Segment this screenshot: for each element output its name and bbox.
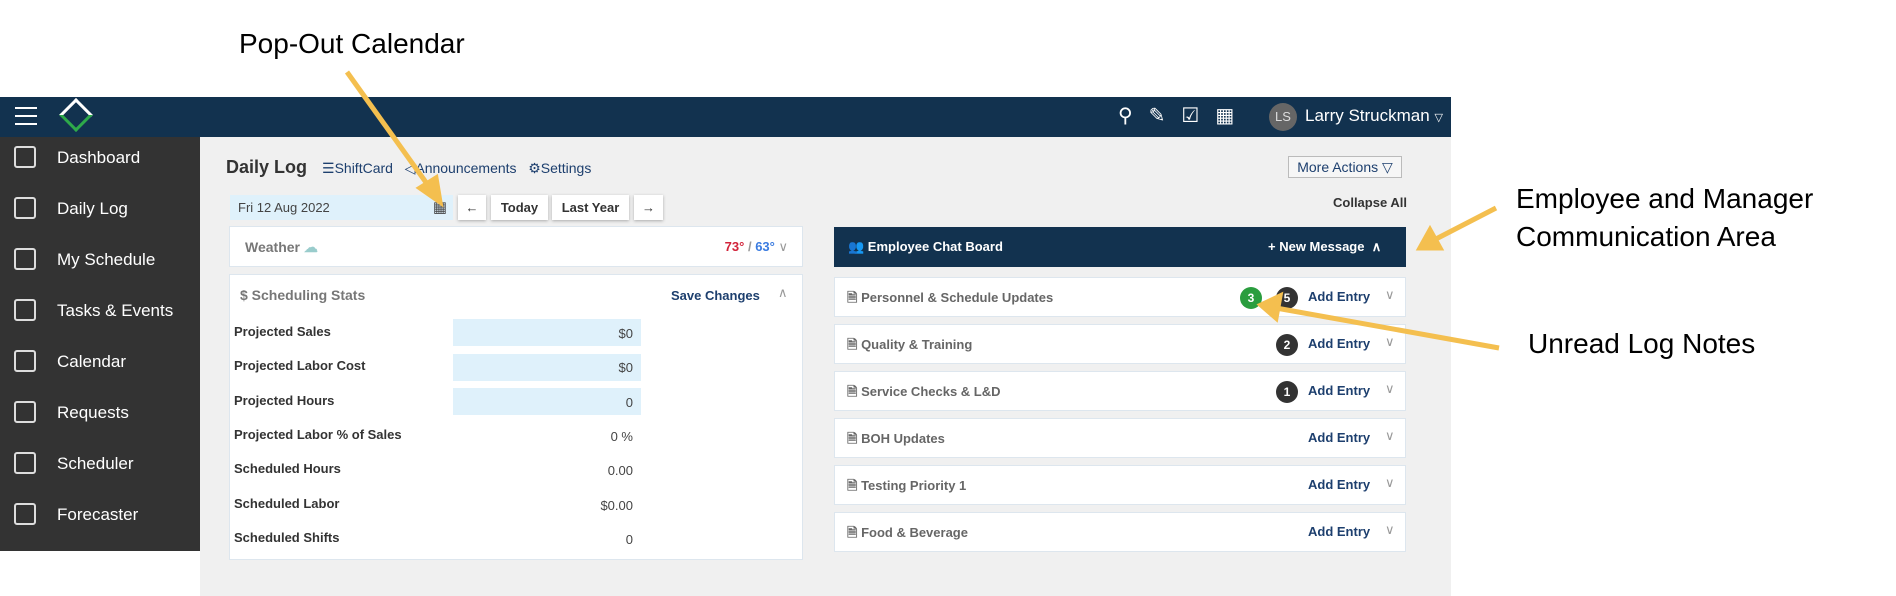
scheduling stats panel: $0.00	[600, 498, 633, 513]
content area	[200, 137, 1451, 596]
more actions button: More Actions ▽	[1297, 159, 1393, 175]
chat board header: 👥 Employee Chat Board	[848, 239, 1003, 254]
nav item	[14, 350, 126, 372]
user avatar: LS	[1275, 109, 1291, 124]
log row: Add Entry	[1308, 383, 1370, 398]
weather panel: 73° / 63° ∨	[725, 239, 788, 254]
text: →	[642, 200, 655, 215]
log row: 🗎 Service Checks & L&D	[847, 384, 1001, 399]
nav item: Forecaster	[57, 505, 138, 524]
nav item: Calendar	[57, 352, 126, 371]
top icons: ⚲✎☑▦	[1118, 105, 1250, 127]
scheduling stats panel: Scheduled Hours	[234, 461, 341, 476]
nav item: Dashboard	[57, 148, 140, 167]
chat board header: + New Message ∧	[1268, 239, 1381, 254]
log row: ∨	[1385, 287, 1395, 302]
log row: Add Entry	[1308, 477, 1370, 492]
nav item: Daily Log	[57, 199, 128, 218]
log row: 🗎 Testing Priority 1	[847, 478, 966, 493]
annotation: communication area: Communication Area	[1516, 221, 1776, 252]
scheduling stats panel: ∧	[778, 285, 788, 300]
nav item: My Schedule	[57, 250, 155, 269]
page heading: Daily Log ☰ShiftCard ◁Announcements ⚙Settings	[226, 157, 591, 177]
sidebar	[0, 137, 200, 551]
log row: Add Entry	[1308, 524, 1370, 539]
scheduling stats panel	[229, 274, 803, 560]
chat board header	[834, 227, 1406, 267]
nav item	[14, 248, 155, 270]
icon: hamburger	[15, 107, 37, 125]
scheduling stats panel: 0	[626, 395, 633, 410]
scheduling stats panel: $ Scheduling Stats	[240, 287, 365, 303]
log row: 🗎 Quality & Training	[847, 337, 972, 352]
collapse all: Collapse All	[1333, 195, 1407, 210]
scheduling stats panel: 0.00	[608, 463, 633, 478]
nav item	[14, 503, 138, 525]
log row: ∨	[1385, 334, 1395, 349]
scheduling stats panel: Projected Hours	[234, 393, 334, 408]
text: Today	[501, 200, 538, 215]
scheduling stats panel: Scheduled Labor	[234, 496, 339, 511]
top nav bar	[0, 97, 1451, 137]
scheduling stats panel: $0	[619, 326, 633, 341]
text: Last Year	[562, 200, 619, 215]
scheduling stats panel: $0	[619, 360, 633, 375]
nav buttons	[458, 195, 486, 220]
nav item: Requests	[57, 403, 129, 422]
annotation: communication area: Employee and Manager	[1516, 183, 1813, 214]
log row: Add Entry	[1308, 289, 1370, 304]
nav item: Scheduler	[57, 454, 134, 473]
nav item	[14, 299, 173, 321]
log row	[834, 324, 1406, 364]
log row: ∨	[1385, 522, 1395, 537]
log row	[834, 371, 1406, 411]
user avatar	[1269, 103, 1297, 131]
arrow: unread	[1261, 296, 1499, 348]
nav item	[14, 197, 128, 219]
log row: Add Entry	[1308, 430, 1370, 445]
scheduling stats panel: Projected Labor Cost	[234, 358, 365, 373]
weather panel: Weather ☁	[245, 239, 318, 255]
weather panel	[229, 226, 803, 267]
nav item	[14, 401, 129, 423]
scheduling stats panel: Save Changes	[671, 288, 760, 303]
scheduling stats panel: 0 %	[611, 429, 633, 444]
annotation: unread log notes: Unread Log Notes	[1528, 328, 1755, 359]
log row: 2	[1284, 338, 1290, 352]
log row: ∨	[1385, 475, 1395, 490]
annotation: communication area	[1516, 183, 1813, 252]
scheduling stats panel: Scheduled Shifts	[234, 530, 339, 545]
log row	[834, 418, 1406, 458]
nav buttons: ←	[466, 200, 478, 215]
scheduling stats panel: Projected Sales	[234, 324, 331, 339]
date input: Fri 12 Aug 2022	[238, 200, 330, 215]
log row: ∨	[1385, 381, 1395, 396]
log row: 🗎 Personnel & Schedule Updates	[847, 290, 1053, 305]
nav item	[14, 146, 140, 168]
log row: Add Entry	[1308, 336, 1370, 351]
date input	[230, 195, 453, 220]
log row: 3	[1248, 291, 1254, 305]
annotation: pop-out calendar: Pop-Out Calendar	[239, 28, 465, 59]
log row: 🗎 BOH Updates	[847, 431, 945, 446]
arrow: chat board	[1420, 208, 1496, 248]
log row: 5	[1284, 291, 1290, 305]
more actions button	[1288, 156, 1402, 178]
log row	[834, 277, 1406, 317]
user name: Larry Struckman ▽	[1305, 106, 1443, 125]
scheduling stats panel: Projected Labor % of Sales	[234, 427, 402, 442]
arrow: calendar	[347, 72, 440, 202]
log row: 🗎 Food & Beverage	[847, 525, 968, 540]
nav item	[14, 452, 134, 474]
log row: ∨	[1385, 428, 1395, 443]
log row: 1	[1284, 385, 1290, 399]
icon: logo	[59, 98, 93, 132]
date input: ▦	[433, 199, 447, 216]
nav item: Tasks & Events	[57, 301, 173, 320]
scheduling stats panel: 0	[626, 532, 633, 547]
log row	[834, 465, 1406, 505]
log row	[834, 512, 1406, 552]
